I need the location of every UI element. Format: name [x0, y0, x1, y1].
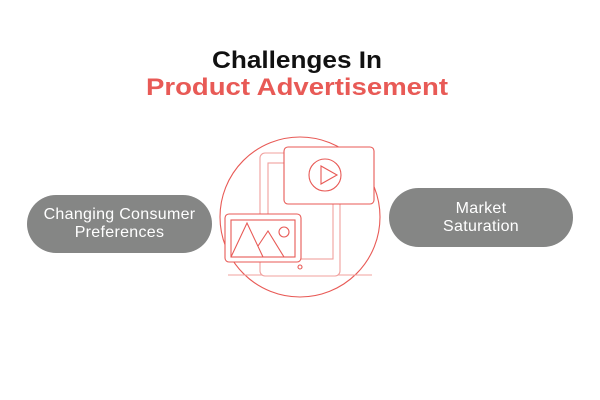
pill: changing consumer preferences: Preferences — [75, 224, 164, 241]
pill: market saturation — [389, 188, 573, 247]
video card — [284, 147, 374, 204]
title line 2: Product Advertisement — [146, 74, 448, 101]
title — [146, 47, 448, 101]
pill: market saturation: Market — [456, 200, 506, 216]
pill: changing consumer preferences: Changing Consumer — [44, 206, 195, 223]
title line 1: Challenges In — [212, 47, 382, 74]
image card — [225, 214, 301, 262]
tablet — [260, 153, 340, 276]
pill: changing consumer preferences — [27, 195, 212, 253]
circle — [220, 137, 380, 297]
pill: market saturation: Saturation — [443, 218, 519, 234]
